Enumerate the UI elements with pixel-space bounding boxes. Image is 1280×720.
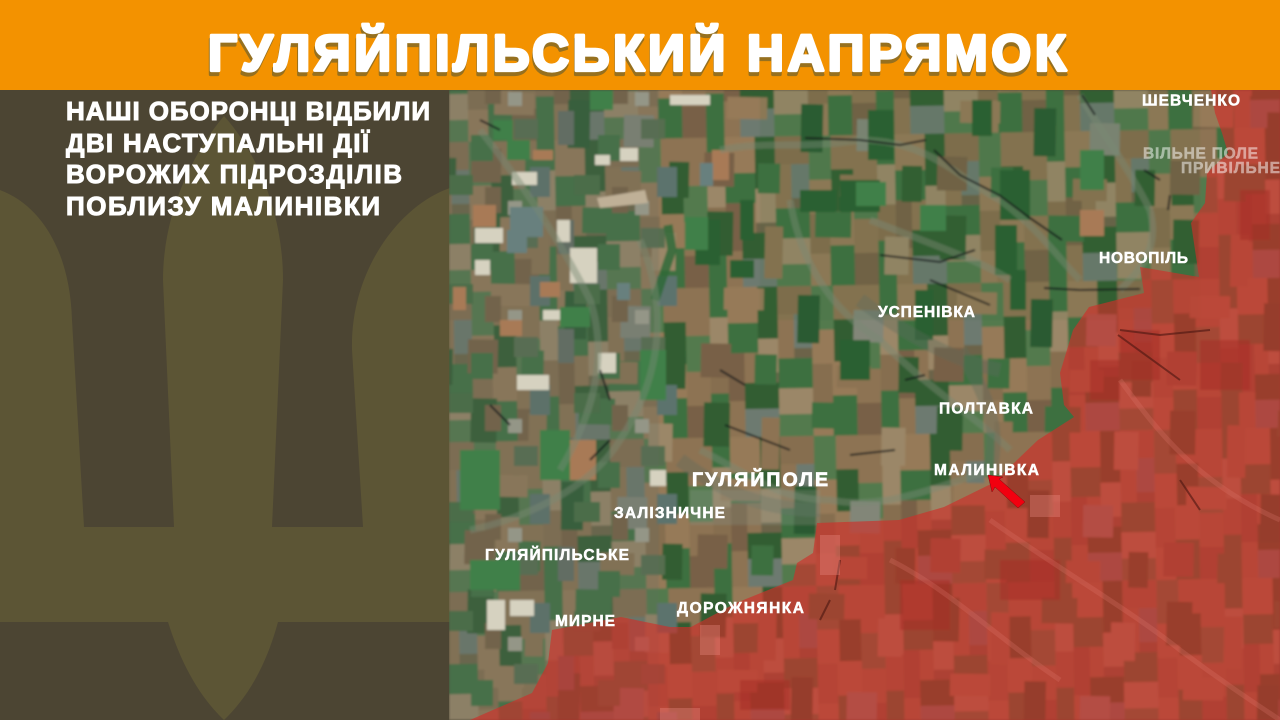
header bar (0, 0, 1280, 90)
arrow: enemy attack direction (988, 475, 1025, 508)
label: Гуляйпільське: ГУЛЯЙПІЛЬСЬКЕ (485, 546, 629, 564)
title: ГУЛЯЙПІЛЬСЬКИЙ НАПРЯМОК (207, 28, 1067, 86)
label: Привільне: ПРИВІЛЬНЕ (1181, 160, 1280, 177)
icon: trident emblem (0, 116, 450, 720)
label: Полтавка: ПОЛТАВКА (939, 400, 1033, 418)
label: Гуляйполе: ГУЛЯЙПОЛЕ (692, 467, 828, 491)
map labels (485, 92, 1280, 630)
text block: summary: ПОБЛИЗУ МАЛИНІВКИ (66, 191, 380, 221)
text block: summary (66, 96, 430, 221)
label: Новопіль: НОВОПІЛЬ (1099, 250, 1188, 267)
label: Малинівка: МАЛИНІВКА (934, 462, 1039, 479)
label: Залізничне: ЗАЛІЗНИЧНЕ (614, 505, 725, 522)
map: satellite fields (449, 90, 1280, 720)
label: Успенівка: УСПЕНІВКА (878, 304, 975, 321)
text block: summary: ДВІ НАСТУПАЛЬНІ ДІЇ (66, 128, 370, 158)
text block: summary: ВОРОЖИХ ПІДРОЗДІЛІВ (66, 159, 402, 189)
label: Дорожнянка: ДОРОЖНЯНКА (677, 600, 804, 617)
panel: left text background (0, 90, 450, 720)
enemy-held territory overlay (470, 90, 1280, 720)
title: ГУЛЯЙПІЛЬСЬКИЙ НАПРЯМОК (208, 24, 1067, 82)
label: Шевченко: ШЕВЧЕНКО (1142, 92, 1240, 110)
label: Вільне Поле: ВІЛЬНЕ ПОЛЕ (1143, 146, 1258, 162)
label: Мирне: МИРНЕ (555, 613, 615, 630)
text block: summary: НАШІ ОБОРОНЦІ ВІДБИЛИ (66, 96, 430, 126)
